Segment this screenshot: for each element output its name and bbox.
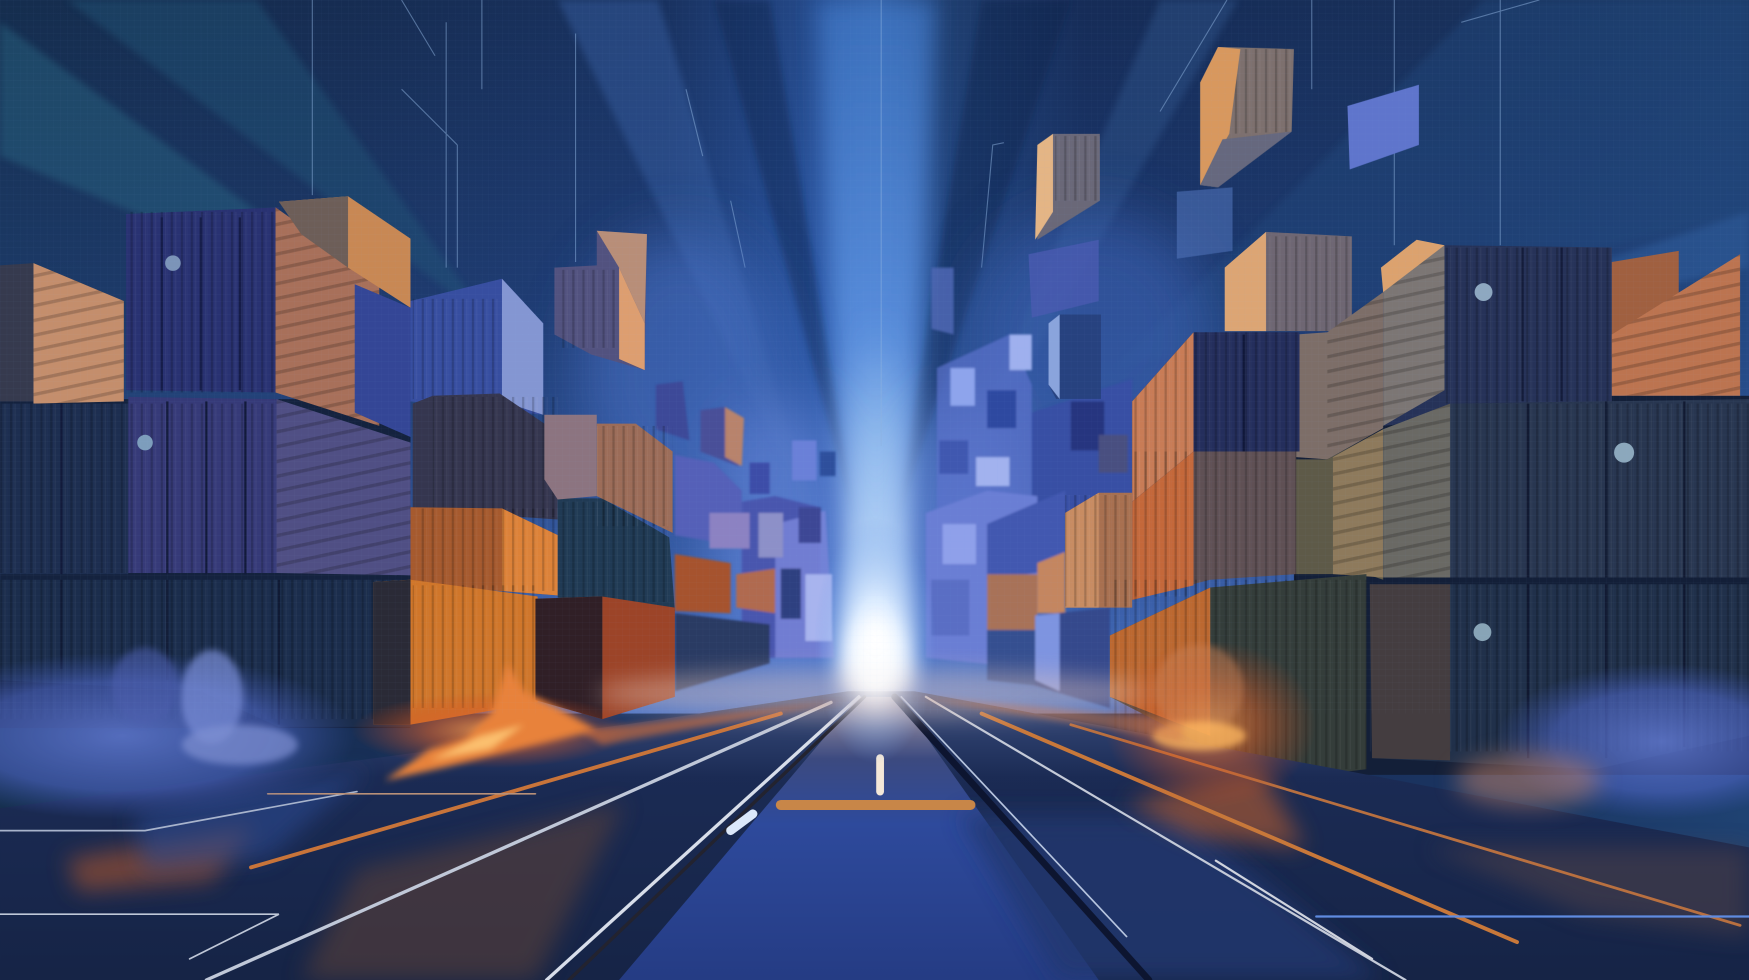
- ground plane: [0, 691, 1749, 980]
- fire and sparks, right: [915, 641, 1316, 808]
- floating container: pale lower: [1028, 240, 1099, 318]
- floating container: tan: [1035, 134, 1100, 240]
- container: dark mid column: [413, 394, 558, 520]
- perspective light streaks: [0, 0, 1749, 535]
- blue haze behind stacks: [580, 212, 1216, 669]
- container: bottom left dark: [0, 580, 410, 727]
- blue smoke, left: [0, 648, 357, 819]
- container: blue mid column: [410, 279, 543, 415]
- floating container: periwinkle: [1347, 85, 1419, 169]
- container: top blue big: [1381, 240, 1612, 426]
- floating container: left of beam: [554, 231, 647, 370]
- wall backing: [1294, 396, 1749, 775]
- distant containers, right: [926, 268, 1132, 708]
- container: right tan column: [1296, 292, 1383, 459]
- floating containers: [554, 47, 1419, 399]
- container: far left tan: [0, 263, 124, 404]
- container: right blue upper: [355, 284, 410, 437]
- container: mid orange and blue: [1132, 332, 1299, 502]
- left container wall: [0, 196, 675, 728]
- container: top orange: [279, 196, 410, 308]
- container: mid orange lower: [1132, 452, 1296, 600]
- container: teal stack: [558, 498, 675, 611]
- wall backing: [0, 399, 410, 728]
- container: glowing orange box: [374, 580, 538, 725]
- container: upper tan: [1225, 232, 1352, 331]
- blue smoke, right: [1456, 663, 1749, 819]
- container: far right orange: [1612, 251, 1740, 396]
- central light beam: [816, 0, 935, 691]
- container: middle tan lower: [1296, 429, 1383, 580]
- right container wall: [1065, 232, 1749, 780]
- hanging wires: [312, 0, 1539, 446]
- container: near centre orange: [1065, 493, 1132, 608]
- container: rust stack: [535, 596, 675, 719]
- floating container: blue: [1049, 314, 1101, 399]
- vanishing-point glow: [597, 518, 1154, 764]
- container: tan small: [544, 415, 673, 533]
- floating container: upper pale: [1177, 187, 1233, 259]
- fine blueprint grid overlay: [0, 0, 1749, 714]
- container: lower left slate: [0, 397, 410, 575]
- distant containers, left: [656, 381, 835, 691]
- floating container: top large: [1200, 47, 1294, 187]
- fire and sparks, left: [351, 663, 848, 780]
- container: orange band: [410, 507, 558, 595]
- container: large blue upper: [126, 207, 379, 426]
- container: right bottom row: [1370, 584, 1749, 769]
- container: near orange and green: [1110, 574, 1366, 780]
- container: right slate row: [1383, 399, 1749, 578]
- rails and lane markings: [0, 697, 1749, 980]
